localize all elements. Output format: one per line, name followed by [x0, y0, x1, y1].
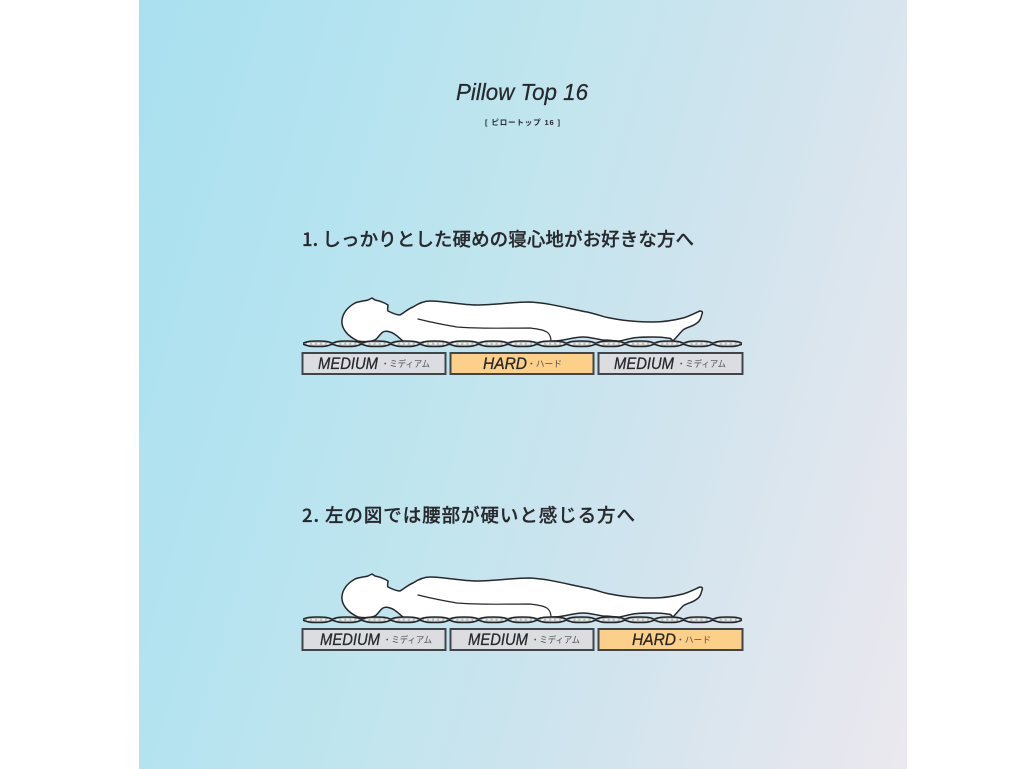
body silhouette 1	[342, 298, 702, 342]
background panel	[139, 0, 907, 769]
zone: hard right 2	[598, 629, 742, 650]
zone: hard centre 1: HARD	[483, 354, 527, 373]
section 1 heading: 1. しっかりとした硬めの寝心地がお好きな方へ	[302, 226, 694, 252]
zone: medium centre 2: ・ミディアム	[531, 634, 580, 645]
zone: medium left 1: MEDIUM	[318, 354, 379, 373]
zone: medium left 1	[302, 353, 446, 374]
body silhouette 2	[342, 574, 702, 618]
zone: hard centre 1: ・ハード	[527, 359, 562, 369]
mattress coil layer 2	[303, 616, 742, 624]
zone: hard right 2: ・ハード	[676, 635, 711, 645]
zone: medium left 2: ・ミディアム	[383, 634, 432, 645]
section 2 diagram	[302, 574, 742, 650]
mattress coil layer 1	[303, 340, 742, 348]
section 2 heading: 2. 左の図では腰部が硬いと感じる方へ	[302, 502, 635, 528]
section 1 diagram	[302, 298, 742, 374]
zone: medium right 1: ・ミディアム	[677, 358, 726, 369]
subtitle: [ ピロートップ 16 ]	[485, 118, 560, 127]
title: Pillow Top 16	[456, 79, 588, 105]
zone: medium centre 2	[450, 629, 594, 650]
zone: medium left 2: MEDIUM	[320, 630, 381, 649]
zone: hard right 2: HARD	[632, 630, 676, 649]
zone: medium left 1: ・ミディアム	[381, 358, 430, 369]
zone: medium left 2	[302, 629, 446, 650]
zone: medium right 1	[598, 353, 742, 374]
zone: hard centre 1	[450, 353, 594, 374]
zone: medium right 1: MEDIUM	[614, 354, 675, 373]
zone: medium centre 2: MEDIUM	[468, 630, 529, 649]
